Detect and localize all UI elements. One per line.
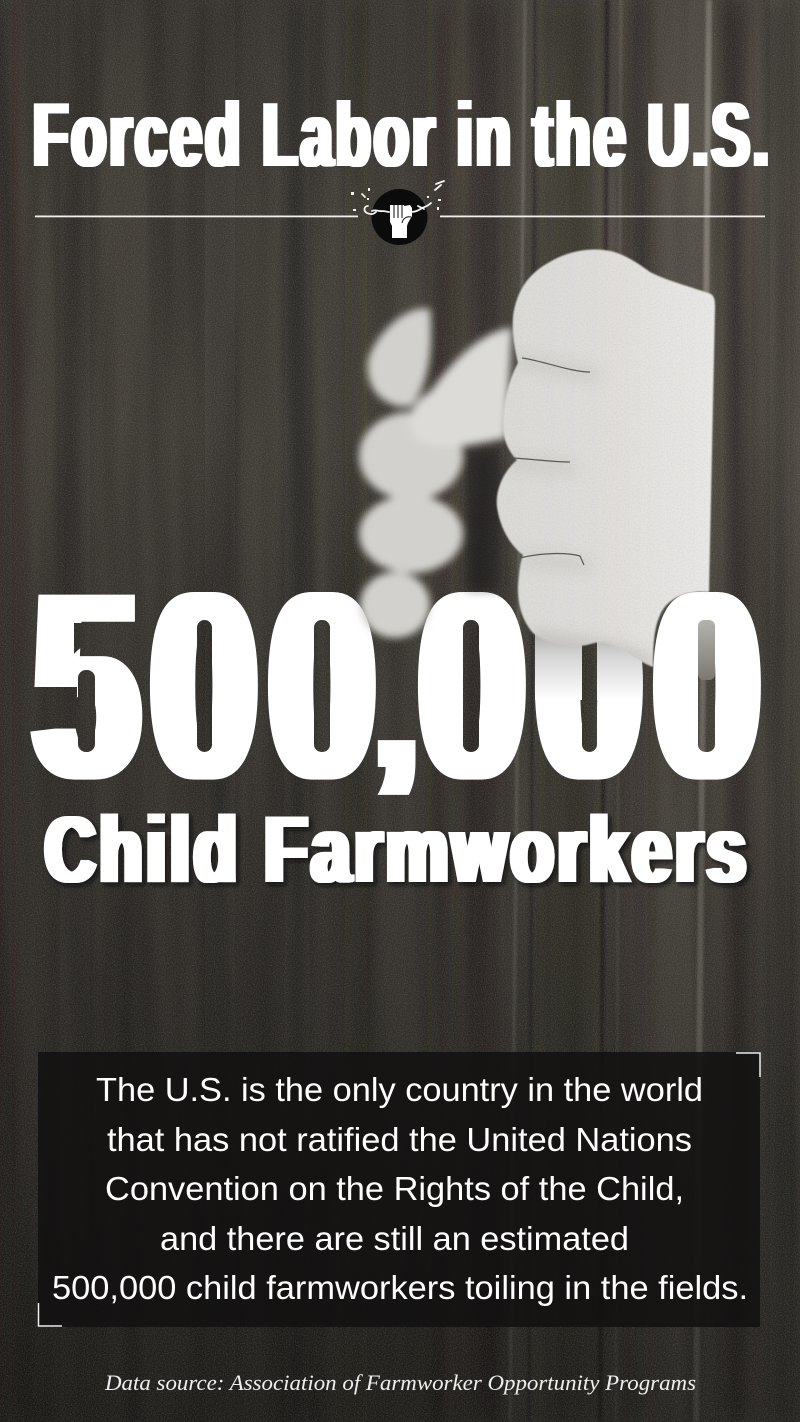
fist [497, 250, 715, 667]
explanation text: Convention on the Rights of the Child, [105, 1170, 684, 1207]
statistic: 500,000: 000 [421, 538, 759, 834]
shadow of hand on fifth digit, left of counter [535, 630, 582, 700]
explanation text: 500,000 child farmworkers toiling in the fields. [52, 1269, 748, 1306]
photo: child's hand gripping bars [359, 245, 720, 675]
explanation text: and there are still an estimated [160, 1220, 629, 1257]
finger creases [513, 358, 590, 565]
corner bracket bottom left [38, 1303, 62, 1326]
title divider right [440, 216, 765, 217]
fist shading and texture [490, 245, 720, 675]
panel: explanation [38, 1052, 760, 1327]
explanation text: The U.S. is the only country in the world [96, 1071, 703, 1108]
dark gap behind hand [466, 450, 500, 590]
hand seen through last digit counter [698, 620, 715, 680]
statistic: 500,000: 500 [35, 538, 373, 834]
explanation text: that has not ratified the United Nations [107, 1121, 692, 1158]
shadow of hand on fifth digit, right of counter [597, 630, 642, 700]
blurred fingers behind bar [359, 308, 512, 638]
statistic: 500,000: , [379, 603, 414, 805]
icon: raised fist breaking chain [351, 181, 444, 245]
corner bracket top right [736, 1053, 760, 1077]
title divider left [35, 216, 358, 217]
explanation text [52, 1071, 748, 1306]
data source: Data source: Association of Farmworker Opportunity Programs [104, 1370, 696, 1395]
statistic: 500,000 [30, 592, 761, 795]
